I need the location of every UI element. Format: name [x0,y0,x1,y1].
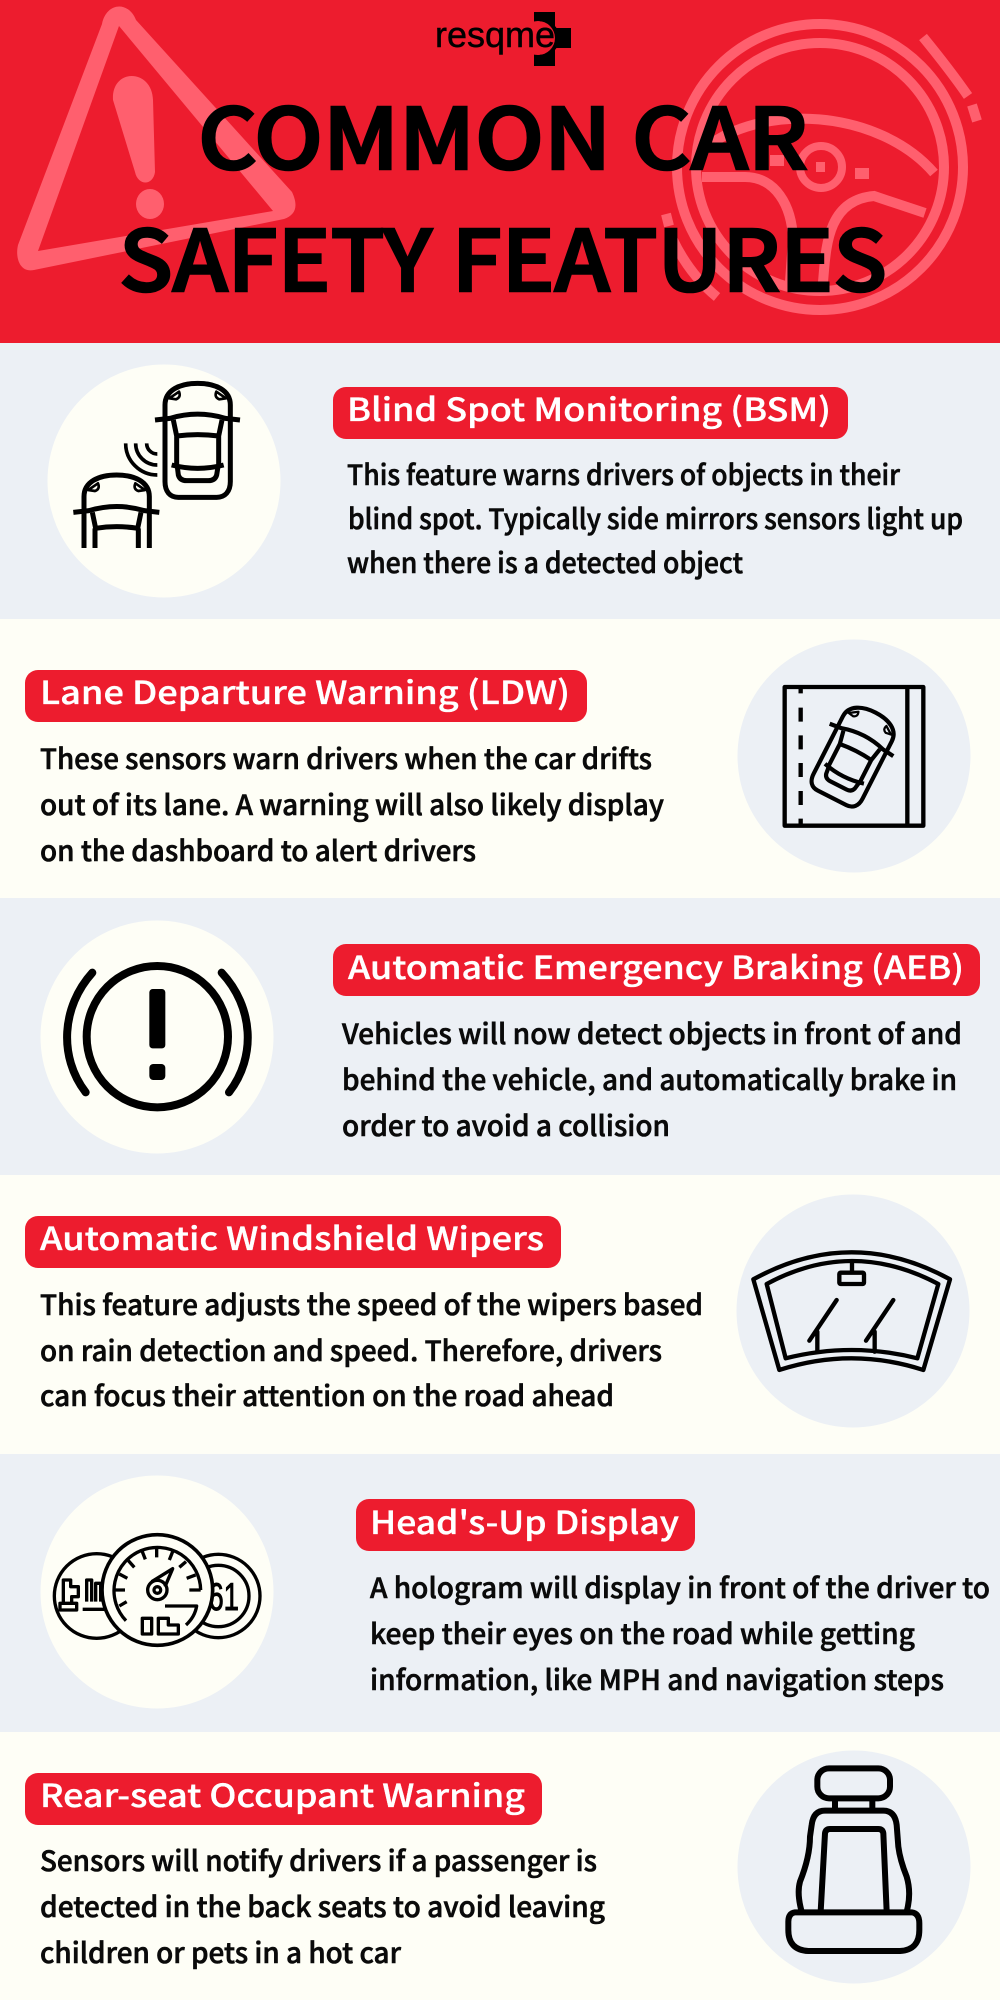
text: LDW description: on the dashboard to alert drivers [40,830,476,870]
text: AEB description: behind the vehicle, and automatically brake in [342,1059,957,1099]
text: HUD description [370,1567,990,1699]
panel: rear-seat occupant warning [0,1732,1000,2000]
text: AEB description: order to avoid a collision [342,1105,670,1145]
icon: lane departure [738,640,970,872]
title [119,73,887,316]
heading: rear-seat: Rear-seat Occupant Warning [40,1771,525,1817]
heading: LDW: Lane Departure Warning (LDW) [40,668,570,714]
text: LDW description: out of its lane. A warning will also likely display [40,784,664,824]
text: HUD description: information, like MPH and navigation steps [370,1659,944,1699]
title: SAFETY FEATURES [119,195,887,316]
text: LDW description: These sensors warn drivers when the car drifts [40,738,652,778]
text: rear-seat description: detected in the back seats to avoid leaving [40,1886,605,1926]
heading: AEB: Automatic Emergency Braking (AEB) [348,943,964,989]
text: HUD description: A hologram will display in front of the driver to [370,1567,990,1607]
logo: resqme: resqme [435,14,555,55]
panel: header [0,0,1000,343]
title: COMMON CAR [198,73,808,194]
panel: automatic windshield wipers [0,1175,1000,1454]
text: wipers description: on rain detection and speed. Therefore, drivers [40,1330,662,1370]
text: BSM description: blind spot. Typically side mirrors sensors light up [348,498,963,538]
text: rear-seat description [40,1840,605,1972]
icon: steering wheel [666,24,977,310]
heading: BSM: Blind Spot Monitoring (BSM) [347,385,831,431]
panel: blind spot monitoring [0,343,1000,619]
text: BSM description: This feature warns drivers of objects in their [347,454,901,494]
logo: resqme [435,12,571,66]
text: BSM description [347,454,963,582]
text: rear-seat description: Sensors will notify drivers if a passenger is [40,1840,597,1880]
icon: dashboard gauges [40,1476,274,1708]
text: AEB description [341,1013,962,1145]
text: wipers description [40,1284,703,1415]
text: wipers description: can focus their attention on the road ahead [40,1375,614,1415]
icon: dashboard gauges: 61 [208,1575,239,1619]
icon: blind spot cars [48,364,280,598]
icon: warning triangle [17,7,295,270]
text: HUD description: keep their eyes on the road while getting [370,1613,915,1653]
icon: car seat [738,1750,970,1984]
heading: HUD: Head's-Up Display [370,1498,679,1544]
icon: windshield [736,1194,970,1428]
heading: wipers: Automatic Windshield Wipers [40,1214,544,1260]
panel: automatic emergency braking [0,898,1000,1175]
panel: lane departure warning [0,619,1000,898]
text: AEB description: Vehicles will now detect objects in front of and [341,1013,962,1053]
text: LDW description [40,738,664,870]
text: wipers description: This feature adjusts the speed of the wipers based [40,1284,703,1324]
text: BSM description: when there is a detected object [347,542,743,582]
text: rear-seat description: children or pets in a hot car [40,1932,402,1972]
panel: head's-up display [0,1454,1000,1732]
icon: brake warning [40,920,274,1154]
